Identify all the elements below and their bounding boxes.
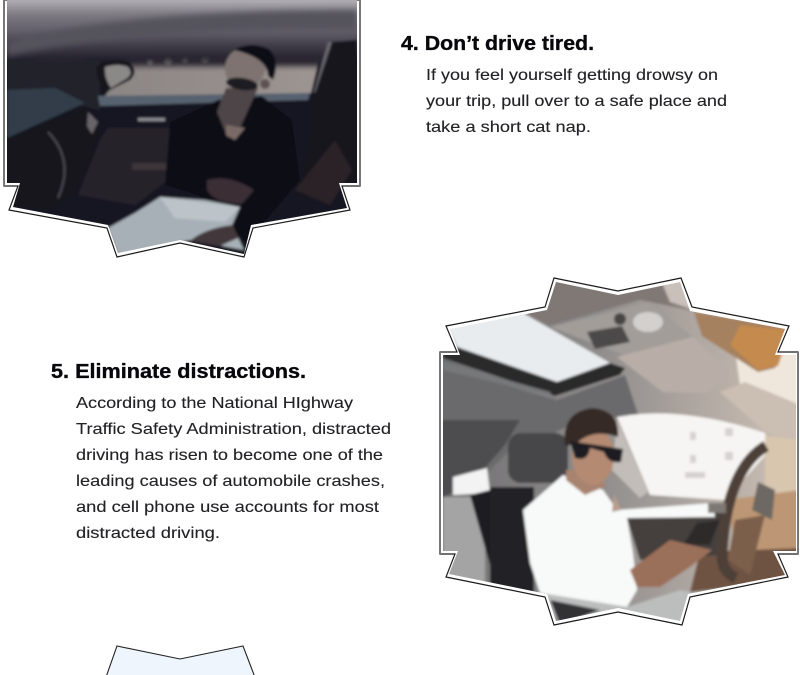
- photo frame: next tip, cropped at page bottom: [105, 646, 256, 675]
- text block: tip 4: [426, 67, 727, 136]
- text block: tip 5: leading causes of automobile crashes,: [76, 473, 385, 490]
- photo: driver using a phone behind the wheel: [436, 275, 800, 630]
- text block: tip 4: If you feel yourself getting drowsy on: [426, 67, 718, 84]
- text block: tip 5: and cell phone use accounts for most: [76, 499, 380, 516]
- text block: tip 5: driving has risen to become one of the: [76, 447, 383, 464]
- photo: man napping in a parked car: [0, 0, 365, 260]
- text block: tip 5: [76, 395, 391, 542]
- text block: tip 5: Traffic Safety Administration, distracted: [76, 421, 391, 438]
- text block: tip 5: According to the National HIghway: [76, 395, 353, 412]
- heading: tip 5: 5. Eliminate distractions.: [51, 361, 306, 383]
- text block: tip 5: distracted driving.: [76, 525, 220, 542]
- text block: tip 4: take a short cat nap.: [426, 119, 591, 136]
- heading: tip 4: 4. Don’t drive tired.: [401, 33, 594, 55]
- text block: tip 4: your trip, pull over to a safe place and: [426, 93, 727, 110]
